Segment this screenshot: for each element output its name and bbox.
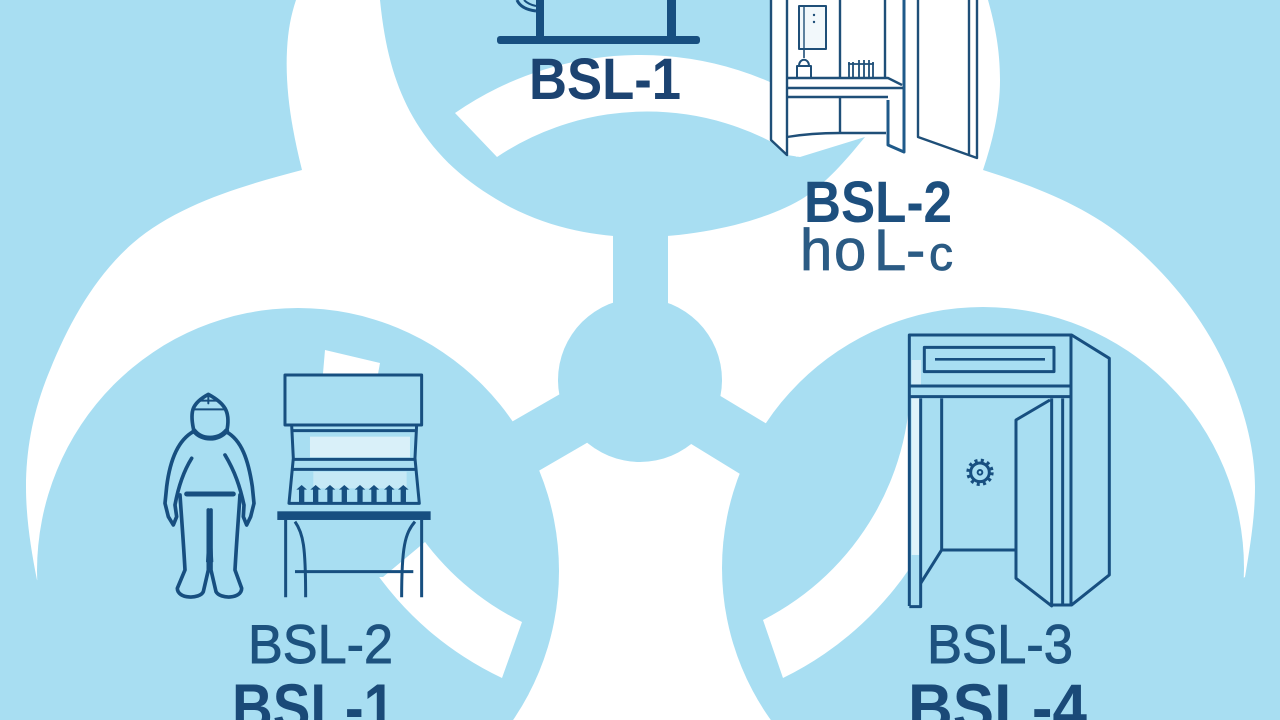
label: garbled sublabel: L [874, 218, 906, 283]
central hub and spokes [508, 225, 772, 477]
ring segment lower left [316, 400, 522, 678]
icon: gear [968, 460, 992, 484]
label: garbled sublabel: h [800, 218, 832, 283]
label: garbled sublabel: c [929, 228, 953, 281]
label: garbled sublabel: o [834, 218, 866, 283]
lower right circle cutout [722, 307, 1244, 720]
icon: BSL-1 lab bench [497, 0, 700, 44]
cover: table area blue [277, 375, 431, 577]
icon: biosafety hood on table [277, 375, 431, 597]
ring segment lower right [763, 365, 966, 678]
icon: BSL-2 safety cabinet [771, 0, 985, 160]
label: BSL-1 top: BSL-1 [529, 47, 681, 112]
ring segment lower left upper stub [322, 350, 380, 385]
top circle cutout [380, 0, 865, 237]
icon: protective suit [165, 394, 254, 597]
label: garbled sublabel: - [906, 218, 925, 283]
icon: BSL-3 containment booth [909, 335, 1109, 607]
ring segment top [455, 55, 827, 157]
lower left circle cutout [37, 308, 559, 720]
label: BSL-2 upper right: BSL-2 [804, 170, 952, 235]
label: BSL-2 lower left: BSL-2 [248, 613, 393, 675]
label: BSL-3: BSL-3 [927, 613, 1073, 675]
